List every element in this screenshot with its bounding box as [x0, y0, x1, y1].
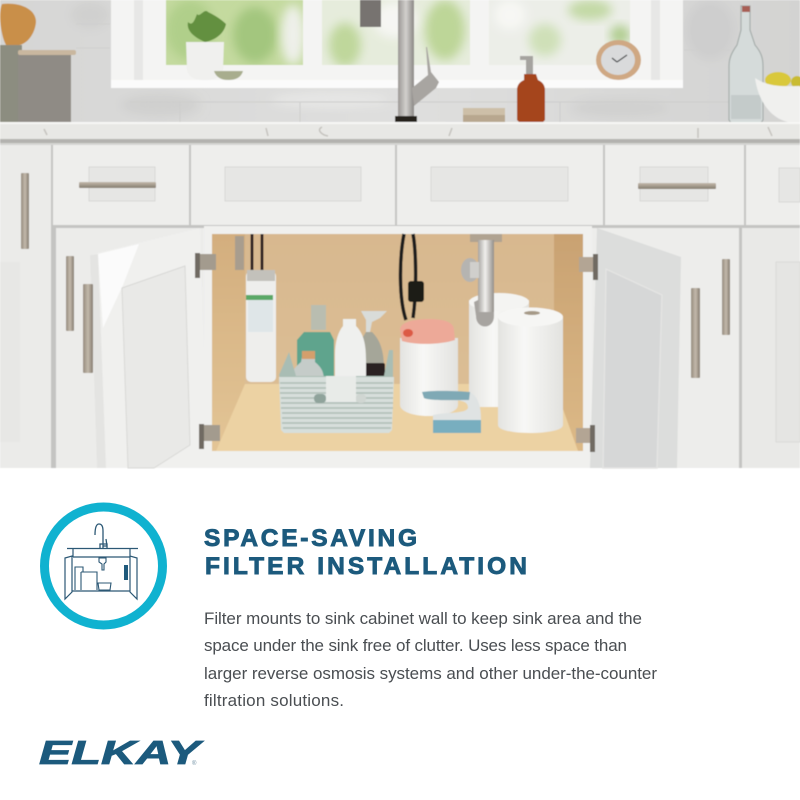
- heading: FILTER INSTALLATION: [205, 553, 527, 580]
- cabinet base: [0, 145, 800, 468]
- body text: filtration solutions.: [204, 691, 344, 710]
- icon: sink cabinet in circle: [44, 507, 162, 625]
- hinges: [195, 253, 598, 452]
- black cord and adapter: [400, 234, 424, 320]
- drawers row: [0, 145, 800, 468]
- filter supply tubes: [252, 234, 262, 270]
- far-left door handle: [21, 173, 29, 249]
- glass jar: [0, 45, 22, 123]
- body text: [204, 609, 657, 710]
- white detergent bottle: [335, 319, 366, 378]
- faucet: [360, 0, 439, 122]
- icon: faucet: [95, 524, 107, 548]
- icon: countertop and cabinet: [65, 548, 138, 599]
- icon: storage items: [75, 567, 111, 590]
- water filter: [246, 270, 276, 382]
- right open door: [590, 228, 681, 468]
- potted plant: [186, 11, 226, 80]
- heading: SPACE-SAVING: [204, 525, 417, 552]
- body text: Filter mounts to sink cabinet wall to keep sink area and the: [204, 609, 642, 628]
- canister: [18, 50, 76, 124]
- icon: filter: [124, 565, 128, 580]
- logo: ELKAY: ELKAY: [39, 734, 204, 771]
- body text: space under the sink free of clutter. Uses less space than: [204, 636, 627, 655]
- dark jar: [358, 363, 385, 379]
- spray bottle: [358, 311, 387, 370]
- woven basket: [279, 350, 394, 433]
- scrub brush: [422, 391, 481, 433]
- logo: ELKAY: [39, 734, 204, 771]
- fruit bowl with lemons: [755, 72, 800, 122]
- clock: [596, 40, 641, 80]
- left door handle: [83, 284, 93, 373]
- right door handle: [691, 288, 700, 378]
- small bowl: [214, 71, 243, 80]
- countertop: [0, 122, 800, 147]
- green soap bottle: [297, 305, 334, 380]
- trash bag roll: [400, 319, 458, 416]
- heading: [204, 525, 527, 580]
- small glass bottle: [291, 351, 324, 382]
- back paper towel roll: [469, 293, 529, 407]
- left open door: [90, 228, 208, 468]
- front paper towel roll: [498, 308, 563, 433]
- marble backsplash wall: [0, 0, 800, 124]
- logo: ELKAY: ®: [192, 760, 197, 767]
- body text: larger reverse osmosis systems and other under-the-counter: [204, 664, 657, 683]
- chrome P-trap pipe: [461, 234, 502, 326]
- cabinet interior: [212, 234, 583, 451]
- wooden utensil: [0, 4, 36, 45]
- icon: pipe: [99, 558, 106, 570]
- photo: under-sink cabinet in kitchen: [0, 0, 800, 468]
- cabinet frame: [204, 226, 592, 468]
- glass bottle: [729, 6, 763, 123]
- amber soap dispenser: [517, 56, 545, 122]
- stone soap dish: [463, 108, 505, 122]
- lower cabinet doors behind open doors: [0, 228, 800, 468]
- window: [111, 0, 683, 88]
- wall bracket: [235, 236, 244, 270]
